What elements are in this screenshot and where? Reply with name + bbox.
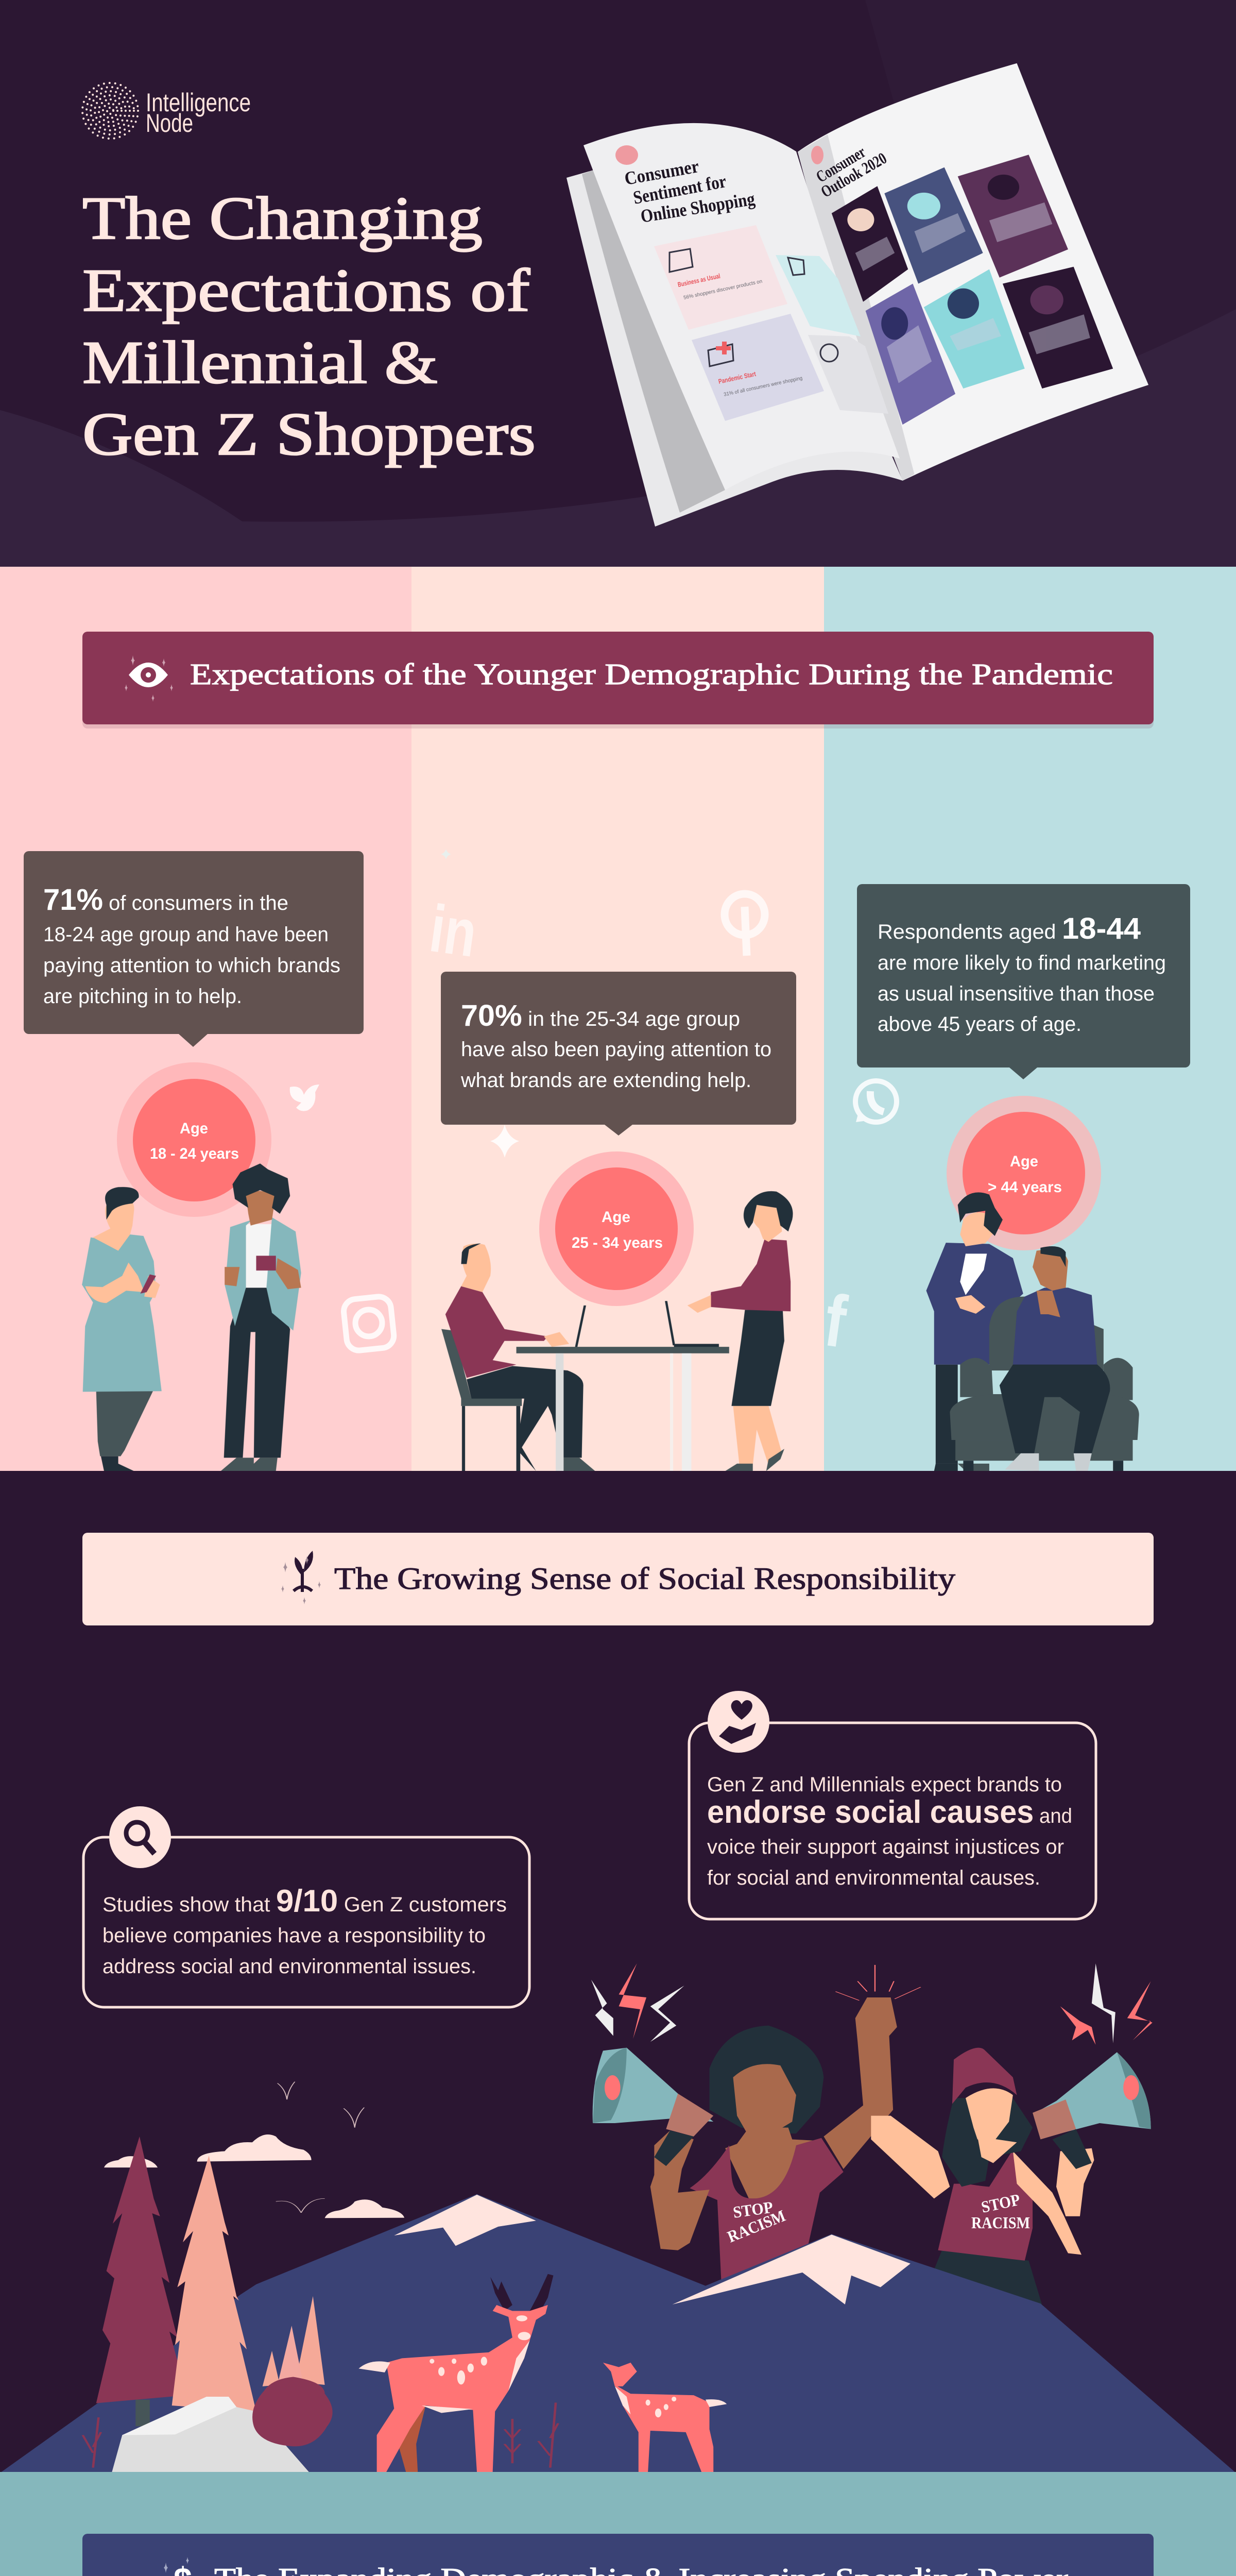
text box: endorse social causes: voice their support against injustices or (707, 1836, 1064, 1858)
panel: the expanding demographic and spending power (0, 2472, 1236, 2576)
logo: Intelligence Node: Intelligence (146, 88, 251, 117)
left page cards (615, 145, 888, 421)
bush (252, 2377, 333, 2446)
grass (83, 2402, 558, 2468)
text box: endorse social causes: endorse social causes and (707, 1794, 1072, 1830)
callout: 25-34: 70% in the 25-34 age group (461, 999, 740, 1032)
heading bar: expectations: Expectations of the Younger Demographic During the Pandemic (190, 657, 1113, 691)
report spread text: Online Shopping (639, 188, 756, 227)
text box: 9/10 Gen Z customers (83, 1806, 529, 2007)
panel: the growing sense of social responsibility (0, 1471, 1236, 2473)
mountains (0, 2194, 1236, 2473)
illustration: protesters with megaphones (591, 1963, 1153, 2305)
open report magazine mockup: 56% shoppers discover products on (683, 279, 763, 301)
small deer (603, 2363, 727, 2472)
heading bar: expectations (82, 632, 1154, 728)
title: Expectations of (82, 257, 530, 324)
callout: 18-24 (24, 851, 364, 1047)
pine trees (96, 2137, 187, 2403)
open report magazine mockup (566, 63, 1148, 527)
social media icons: f (820, 1279, 851, 1363)
logo: Intelligence Node (82, 83, 251, 139)
shirt slogans: STOP (980, 2190, 1022, 2216)
open report magazine mockup: 31% of all consumers were shopping (723, 376, 803, 398)
illustration: older couple with armchair (926, 1192, 1139, 1471)
social media icons: in (425, 891, 482, 971)
text box: endorse social causes (689, 1691, 1096, 1919)
rock (112, 2397, 309, 2472)
icon: dollar sign (162, 2557, 201, 2576)
social media icons (290, 849, 897, 1363)
shirt slogans: RACISM (725, 2206, 788, 2246)
text box: 9/10 Gen Z customers: Studies show that 9/10 Gen Z customers (102, 1884, 507, 1918)
text box: 9/10 Gen Z customers: address social and environmental issues. (102, 1955, 476, 1978)
clouds (104, 2134, 404, 2218)
illustration: colleagues at a desk (441, 1191, 793, 1471)
age badge: over 44 (947, 1096, 1101, 1250)
right page (798, 63, 1148, 481)
icon: sprout (281, 1551, 321, 1604)
callout: 18-24: paying attention to which brands (43, 954, 340, 977)
callout: 25-34 (441, 972, 796, 1136)
text box: endorse social causes: Gen Z and Millennials expect brands to (707, 1773, 1062, 1796)
title: Gen Z Shoppers (82, 400, 536, 468)
heading bar: social responsibility: The Growing Sense of Social Responsibility (334, 1562, 955, 1596)
title: The Changing (82, 184, 483, 252)
callout: 18-24: 71% of consumers in the (43, 883, 288, 917)
logo: Intelligence Node: Node (146, 109, 193, 138)
icon: eye (125, 655, 173, 702)
age badge: 18-24: Age (180, 1120, 208, 1137)
age badge: 18-24 (117, 1062, 271, 1217)
callout: 18-44: above 45 years of age. (878, 1013, 1082, 1036)
panel: expectations of the younger demographic (0, 567, 1236, 1471)
icon: heart in hand (708, 1691, 769, 1753)
age badge: 25-34: 25 - 34 years (572, 1234, 663, 1251)
right page cards (832, 155, 1113, 425)
open report magazine mockup: Pandemic Start (718, 370, 757, 385)
age badge: over 44: Age (1010, 1153, 1038, 1170)
callout: 18-44: are more likely to find marketing (878, 952, 1166, 974)
title (82, 184, 536, 468)
callout: 18-24: are pitching in to help. (43, 985, 242, 1008)
callout: 25-34: what brands are extending help. (460, 1069, 751, 1092)
open report magazine mockup: Business as Usual (677, 272, 721, 289)
age badge: 18-24: 18 - 24 years (150, 1145, 239, 1162)
callout: 25-34: have also been paying attention to (461, 1038, 771, 1061)
text box: endorse social causes: for social and environmental causes. (707, 1867, 1040, 1889)
report spread text: Sentiment for (631, 171, 728, 208)
report spread text: Outlook 2020 (818, 148, 890, 201)
text box: 9/10 Gen Z customers: believe companies have a responsibility to (102, 1924, 486, 1947)
shirt slogans: RACISM (971, 2213, 1030, 2232)
callout: 18-44 (857, 884, 1190, 1079)
big deer (358, 2274, 553, 2472)
age badge: 25-34: Age (602, 1209, 630, 1226)
lightning bolts (591, 1963, 1153, 2045)
illustration: two women talking (82, 1163, 301, 1471)
report spread text: Consumer (623, 156, 700, 189)
age badge: 25-34 (539, 1151, 694, 1306)
report spread text: Consumer (813, 142, 869, 186)
back pages (566, 169, 903, 527)
callout: 18-24: 18-24 age group and have been (43, 923, 329, 946)
shirt slogans (725, 2190, 1030, 2246)
title: Millennial & (82, 329, 438, 396)
age badge: over 44: > 44 years (988, 1179, 1062, 1196)
shirt slogans: STOP (732, 2197, 774, 2222)
heading bar: social responsibility (82, 1533, 1154, 1625)
report spread text (623, 142, 890, 227)
front left page (583, 123, 900, 490)
heading bar: spending power (82, 2534, 1154, 2576)
callout: 18-44: Respondents aged 18-44 (878, 912, 1141, 945)
callout: 18-44: as usual insensitive than those (878, 982, 1155, 1005)
icon: magnifier (109, 1806, 171, 1868)
panel: header (0, 0, 1236, 567)
illustration: mountain landscape with deer (0, 2082, 1236, 2473)
